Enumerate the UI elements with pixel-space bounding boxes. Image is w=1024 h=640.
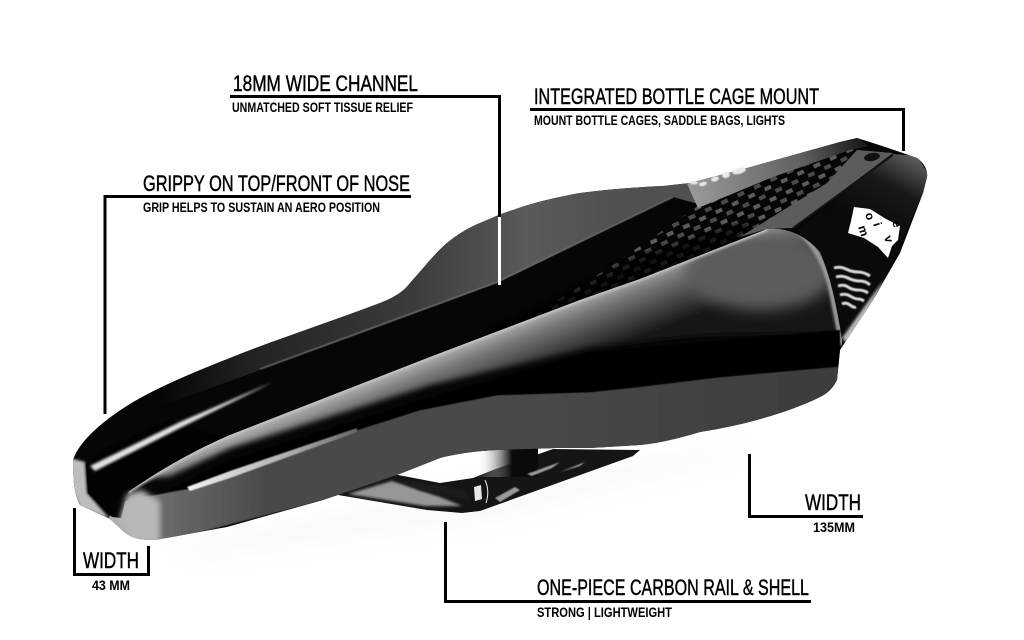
speckled edge [842, 280, 884, 344]
black band above side wall [170, 330, 840, 490]
right nose tip [120, 490, 160, 545]
back wing logo: i [870, 221, 884, 228]
carbon weave [536, 149, 854, 316]
heading: WIDTH [805, 490, 861, 515]
heading: INTEGRATED BOTTLE CAGE MOUNT [534, 84, 819, 109]
leader line [446, 522, 811, 602]
carbon rail [338, 445, 640, 513]
left nose tip [70, 458, 110, 519]
saddle illustration [60, 130, 940, 560]
heading: GRIPPY ON TOP/FRONT OF NOSE [143, 171, 410, 196]
shell base [60, 130, 940, 550]
top sticker logo [690, 166, 747, 187]
subtext: MOUNT BOTTLE CAGES, SADDLE BAGS, LIGHTS [534, 112, 785, 128]
soft ground shadow [170, 450, 760, 560]
heading: WIDTH [83, 548, 139, 573]
heading: 18MM WIDE CHANNEL [233, 71, 418, 96]
left wing raised area [100, 178, 702, 420]
back wing logo: v [881, 234, 897, 245]
mount bolt [864, 152, 880, 162]
back wing logo: o [862, 211, 878, 222]
nose channel [86, 463, 126, 518]
leader line white section [498, 217, 501, 285]
top carbon strip [686, 136, 868, 208]
callout: one-piece carbon rail and shell [446, 522, 811, 620]
side wall [100, 366, 845, 545]
saddle shell [60, 130, 940, 550]
subtext: 135MM [813, 519, 855, 535]
leader line [105, 196, 411, 414]
leader line [750, 454, 863, 516]
centre plate [740, 150, 893, 237]
channel line [793, 155, 893, 228]
callout: width 43 mm [74, 508, 148, 593]
leader line [530, 110, 904, 151]
side wall highlight [187, 428, 357, 491]
callout: 18mm wide channel [230, 71, 501, 285]
crease line [260, 197, 673, 369]
back wing logo: m [855, 224, 872, 238]
left nose highlight [90, 382, 273, 471]
subtext: STRONG | LIGHTWEIGHT [537, 604, 672, 620]
callout: grippy on top [105, 171, 411, 414]
bracket [74, 508, 148, 574]
callout: integrated bottle cage mount [530, 84, 904, 151]
subtext: 43 MM [92, 577, 130, 593]
carbon wave stripes [834, 267, 870, 307]
back wing carbon [840, 154, 928, 334]
leader line [230, 96, 501, 217]
heading: ONE-PIECE CARBON RAIL & SHELL [537, 575, 809, 600]
subtext: GRIP HELPS TO SUSTAIN AN AERO POSITION [143, 199, 380, 215]
callout: width 135mm [750, 454, 863, 535]
back wing logo: e [889, 219, 905, 230]
subtext: UNMATCHED SOFT TISSUE RELIEF [232, 99, 413, 115]
wing top surface [127, 228, 842, 494]
back wing logo [848, 207, 905, 258]
